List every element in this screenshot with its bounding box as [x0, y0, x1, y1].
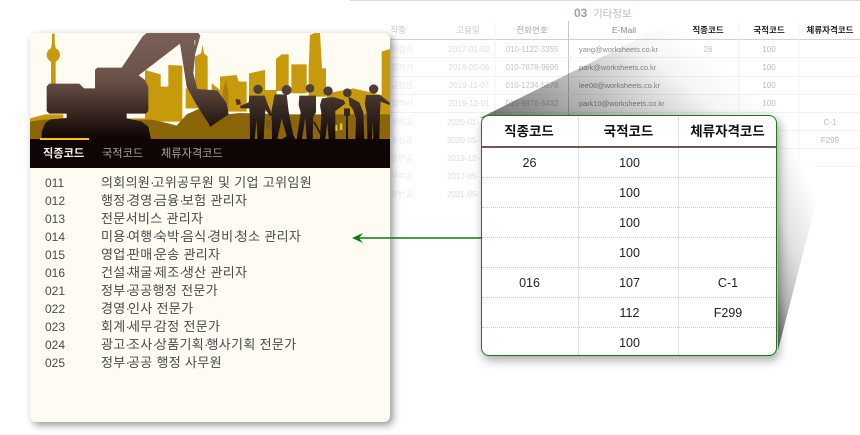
workers [235, 84, 390, 139]
background worksheet: other information table: 010-7878-9696 [506, 63, 558, 72]
table values: 100 [619, 186, 640, 200]
background worksheet: other information table: 2020-01- [447, 118, 479, 127]
skyline [30, 33, 390, 139]
tab navigation bar [30, 139, 390, 168]
background worksheet: other information table: F299 [821, 136, 840, 145]
table values: 016 [519, 276, 540, 290]
tab: nationality code: 국적코드 [102, 148, 143, 160]
background worksheet: other information table: C-1 [824, 118, 837, 127]
code list: 011 [45, 176, 64, 190]
darker foreground skyline [30, 108, 390, 140]
arrow: from table to code list [352, 233, 481, 243]
zoomed code table [480, 115, 776, 356]
background worksheet: other information table: E-Mail [612, 25, 636, 35]
table values [519, 156, 742, 350]
background worksheet: other information table: 2020-05- [447, 136, 479, 145]
background worksheet: other information table: yang@worksheets.co.kr [579, 45, 659, 54]
table values: 100 [619, 246, 640, 260]
code list: 024 [45, 338, 65, 352]
panel: occupation codes [30, 33, 390, 422]
background worksheet: other information table: 운반공 [391, 154, 413, 163]
background worksheet: other information table: 무복공 [391, 118, 413, 127]
background worksheet: other information table: 시험사 [391, 45, 414, 54]
body and cabin [42, 68, 151, 139]
code list: 경영·인사 전문가 [101, 301, 193, 316]
tab: occupation code: 직종코드 [43, 148, 84, 160]
background worksheet: other information table: 운반공 [391, 190, 413, 199]
background worksheet: other information table: 기타정보 [593, 8, 632, 20]
active tab underline [40, 138, 89, 140]
background worksheet: other information table: lee08@worksheets.co.kr [579, 81, 661, 90]
background worksheet: other information table: park@worksheets.co.kr [579, 63, 657, 72]
background worksheet: other information table: 100 [762, 45, 776, 54]
table values: 112 [620, 306, 639, 320]
code list [45, 175, 312, 370]
background worksheet: other information table: 직종코드 [692, 25, 724, 35]
table header: 체류자격코드 [690, 124, 765, 139]
background worksheet: other information table: 국적코드 [753, 25, 785, 35]
background worksheet: other information table: 업직사 [391, 62, 414, 72]
code list: 015 [45, 248, 65, 262]
background worksheet: other information table: 무복공 [391, 172, 413, 181]
code list: 의회의원·고위공무원 및 기업 고위임원 [101, 175, 312, 190]
code list: 회계·세무·감정 전문가 [101, 319, 220, 334]
code list: 정부·공공 행정 사무원 [101, 355, 222, 370]
code list: 영업·판매·운송 관리자 [101, 247, 220, 262]
table values: 100 [619, 336, 640, 350]
table values: 100 [619, 156, 640, 170]
code list: 014 [45, 230, 65, 244]
background worksheet: other information table: 전화번호 [516, 25, 548, 35]
background worksheet: other information table: 2017-05- [447, 172, 479, 181]
code list: 건설·채굴·제조·생산 관리자 [101, 265, 247, 280]
background worksheet: other information table: 2019-12-01 [449, 99, 490, 108]
shadow projection: upper [480, 17, 830, 118]
code list: 021 [45, 284, 65, 298]
background worksheet: other information table: 2017-01-02 [449, 45, 490, 54]
background worksheet: other information table: 100 [762, 81, 776, 90]
boom, arm and bucket [122, 33, 229, 127]
tab: residence status code: 체류자격코드 [161, 148, 223, 160]
code list: 미용·여행·숙박·음식·경비·청소 관리자 [101, 229, 301, 244]
header illustration: excavator, city skyline and workers [30, 33, 390, 139]
code list: 행정·경영·금융·보험 관리자 [101, 193, 247, 208]
background worksheet: other information table: 010-9876-5432 [506, 99, 558, 108]
table values: 100 [619, 216, 640, 230]
table values: 107 [619, 276, 640, 290]
table header [504, 124, 765, 139]
code list: 013 [45, 212, 65, 226]
background worksheet: other information table: 체류자격코드 [807, 25, 854, 35]
background worksheet: other information table: 100 [762, 99, 776, 108]
background worksheet: other information table: 2019-12- [447, 154, 479, 163]
table header: 국적코드 [604, 124, 653, 139]
table values: F299 [714, 306, 742, 320]
background worksheet: other information table: 2021-05- [447, 190, 479, 199]
code list: 정부·공공행정 전문가 [101, 283, 218, 298]
background worksheet: other information table: 26 [704, 45, 713, 54]
background worksheet: other information table: 100 [762, 63, 776, 72]
background worksheet: other information table: 2019-11-07 [449, 81, 490, 90]
code list: 광고·조사·상품기획·행사기획 전문가 [101, 337, 297, 352]
shadow projection: right [777, 118, 835, 350]
code list: 025 [45, 356, 65, 370]
background worksheet: other information table: 010-1122-3355 [506, 45, 559, 54]
background worksheet: other information table: 010-1234-5678 [506, 81, 558, 90]
code list: 전문서비스 관리자 [101, 211, 203, 226]
code list: 023 [45, 320, 65, 334]
code list: 012 [45, 194, 65, 208]
table values: 26 [523, 156, 536, 170]
background worksheet: other information table: 조립공 [391, 136, 413, 145]
table header: 직종코드 [504, 124, 554, 139]
background worksheet: other information table: park10@worksheets.co.kr [579, 99, 665, 108]
background worksheet: other information table: 03 [574, 6, 588, 20]
code list: 022 [45, 302, 65, 316]
excavator [42, 33, 229, 139]
background worksheet: other information table: 직종 [390, 25, 406, 35]
code list: 016 [45, 266, 65, 280]
background worksheet: other information table: 공협업 [391, 80, 413, 90]
background worksheet: other information table: 고용일 [456, 25, 480, 35]
background worksheet: other information table: 업직사 [391, 98, 414, 108]
table values: C-1 [718, 276, 738, 290]
background worksheet: other information table: 2018-05-06 [449, 63, 490, 72]
